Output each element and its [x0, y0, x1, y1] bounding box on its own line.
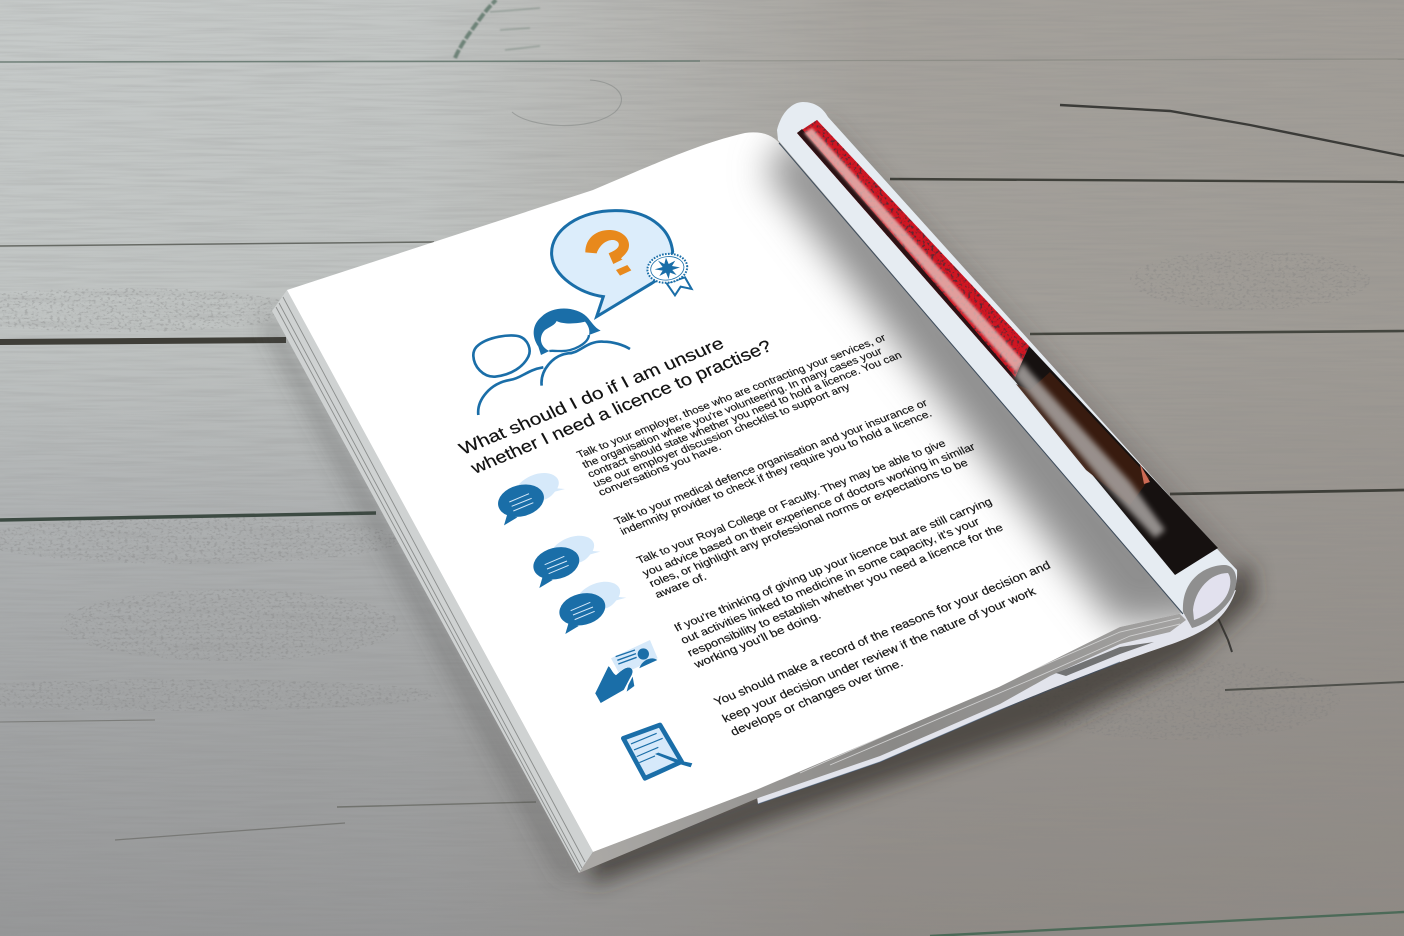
icon: chat bubbles 3	[556, 582, 626, 634]
text: paragraph 1: conversations you have.	[597, 442, 724, 499]
text: paragraph 1	[575, 332, 904, 499]
text: paragraph 2: Talk to your medical defence organisation and your insurance or	[613, 398, 930, 528]
text: paragraph 3: aware of.	[653, 572, 709, 601]
text: paragraph 3: Talk to your Royal College or Faculty. They may be able to give	[635, 438, 948, 567]
icon: rosette seal	[646, 251, 692, 295]
text: paragraph 4: working you'll be doing.	[691, 609, 823, 671]
roll white band	[777, 102, 1237, 615]
icon: chat bubbles 1	[495, 473, 565, 525]
text: paragraph 1: contract should state whether you need to hold a licence. You can	[586, 350, 904, 480]
magazine shadow	[262, 118, 1255, 886]
text: paragraph 1: use our employer discussion checklist to support any	[591, 381, 853, 490]
text: paragraph 3	[635, 438, 978, 601]
icon: chat bubbles 2	[530, 536, 600, 588]
text: paragraph 1: the organisation where you're volunteering. In many cases your	[581, 346, 885, 471]
text: paragraph 3: you advice based on their experience of doctors working in similar	[641, 442, 978, 579]
rolled right-hand page	[777, 102, 1237, 615]
red magazine cover image on roll	[797, 120, 1029, 380]
text: paragraph 5: develops or changes over time.	[729, 657, 906, 739]
icon: large speech bubble	[552, 211, 673, 317]
text: paragraph 5	[712, 559, 1053, 739]
magazine page stack, left edge	[272, 290, 593, 873]
dark magazine cover image on roll	[1014, 346, 1218, 575]
text: paragraph 5: keep your decision under review if the nature of your work	[720, 585, 1039, 726]
icon: tablet with pen	[623, 725, 692, 778]
text: paragraph 3: roles, or highlight any professional norms or expectations to be	[648, 458, 971, 590]
icon: man figure	[473, 335, 543, 415]
body text	[575, 332, 1053, 739]
icon: hand holding licence card	[595, 640, 658, 703]
icons column	[495, 473, 692, 778]
text: paragraph 4	[672, 496, 1006, 671]
text: paragraph 4: If you're thinking of giving up your licence but are still carrying	[672, 496, 995, 634]
magazine lower pages and fore-edge	[579, 590, 1236, 873]
heading: whether I need a licence to practise?	[466, 336, 775, 478]
text: paragraph 5: You should make a record of the reasons for your decision and	[712, 559, 1053, 709]
text: paragraph 2	[613, 398, 934, 538]
text: paragraph 2: indemnity provider to check if they require you to hold a licence.	[619, 409, 934, 538]
heading: What should I do if I am unsure	[455, 333, 727, 458]
roll end opening	[1183, 565, 1236, 628]
magazine open page	[287, 130, 1240, 852]
icon: woman figure	[534, 309, 630, 386]
text: paragraph 4: out activities linked to medicine in some capacity, it's your	[679, 515, 982, 647]
text: paragraph 4: responsibility to establish whether you need a licence for the	[685, 521, 1006, 659]
icon: orange question mark	[585, 230, 631, 276]
text: paragraph 1: Talk to your employer, those who are contracting your services, or	[575, 332, 889, 461]
icon: people with speech bubble and seal	[473, 211, 692, 415]
